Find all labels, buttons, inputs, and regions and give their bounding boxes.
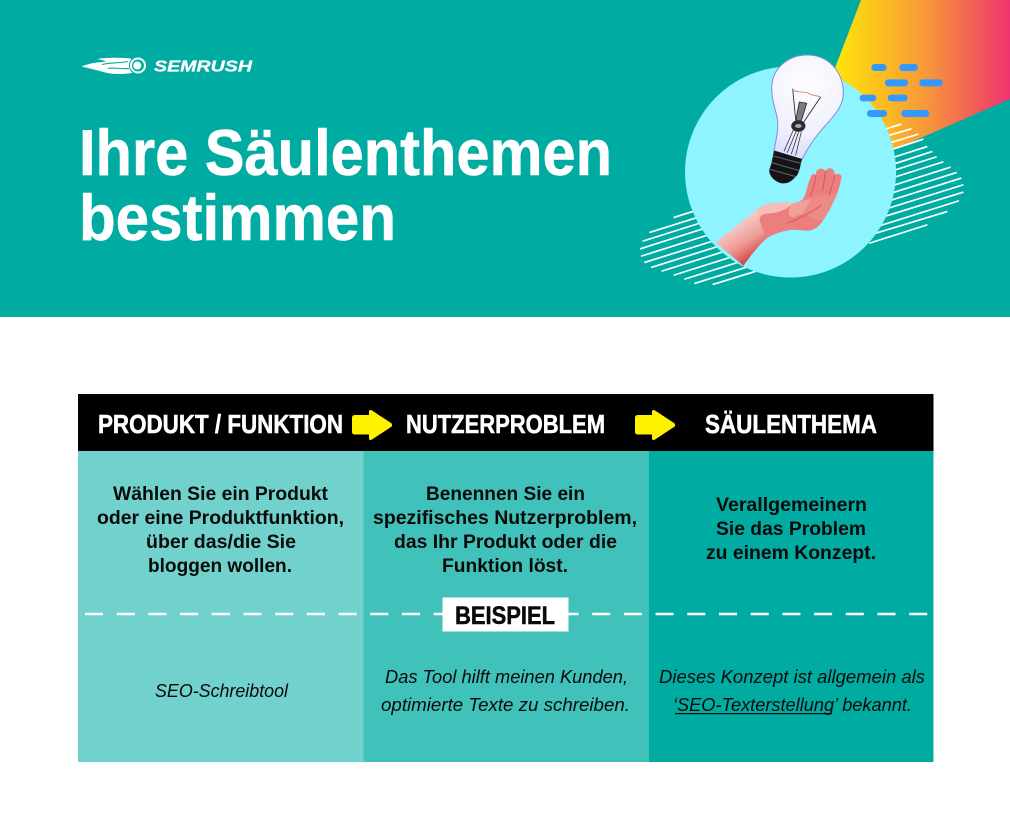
text block: Nutzerproblem description [373, 484, 637, 577]
text block: Säulenthema description: Sie das Problem [716, 519, 866, 540]
example: Säulenthema: ‘SEO-Texterstellung’ bekannt. [673, 695, 912, 715]
text block: Säulenthema description: zu einem Konzept. [706, 543, 876, 564]
header bar [78, 394, 934, 451]
label: Beispiel: BEISPIEL [455, 602, 555, 630]
panel: Produkt / Funktion [78, 451, 364, 762]
text block: Produkt description: Wählen Sie ein Produkt [113, 484, 329, 505]
title: bestimmen [79, 181, 396, 254]
text block: Produkt description: oder eine Produktfunktion, [97, 508, 344, 529]
white diagonal stripes [641, 124, 963, 284]
heading: Säulenthema: SÄULENTHEMA [705, 409, 877, 439]
gradient ray [835, 0, 1010, 150]
text block: Nutzerproblem description: Benennen Sie ein [426, 484, 585, 505]
text block: Säulenthema description [706, 495, 876, 564]
icon: comet [82, 56, 147, 74]
illustration: light bulb and hand [641, 0, 1010, 284]
example: Nutzerproblem: Das Tool hilft meinen Kunden, [385, 667, 628, 687]
logo: Semrush [82, 56, 253, 76]
arrow 2 [635, 410, 675, 440]
hand [716, 168, 842, 266]
heading: Nutzerproblem: NUTZERPROBLEM [406, 409, 605, 439]
text block: Produkt description: über das/die Sie [146, 532, 296, 553]
example: Nutzerproblem: optimierte Texte zu schreiben. [381, 695, 630, 715]
light blue circle [685, 66, 896, 278]
example: Nutzerproblem [381, 667, 630, 715]
screw base [769, 151, 802, 183]
text block: Säulenthema description: Verallgemeinern [716, 495, 867, 516]
example: Säulenthema [659, 667, 925, 715]
panel: Säulenthema [649, 451, 934, 762]
blue dashes [860, 64, 943, 117]
example: Produkt: SEO-Schreibtool [155, 681, 289, 701]
example: Säulenthema: Dieses Konzept ist allgemein als [659, 667, 925, 687]
header banner [0, 0, 1010, 317]
table [78, 394, 934, 762]
light bulb [769, 55, 843, 183]
title: Ihre Säulenthemen [79, 116, 612, 189]
arrow 1 [352, 410, 392, 440]
bulb glass [772, 55, 843, 159]
logo wordmark: SEMRUSH [154, 58, 253, 76]
filament [784, 89, 821, 155]
text block: Nutzerproblem description: Funktion löst. [442, 556, 568, 577]
text block: Nutzerproblem description: das Ihr Produkt oder die [394, 532, 617, 553]
text block: Produkt description: bloggen wollen. [148, 556, 292, 577]
panel: Nutzerproblem [364, 451, 649, 762]
title [79, 116, 612, 254]
text block: Produkt description [97, 484, 344, 577]
heading: Produkt / Funktion: PRODUKT / FUNKTION [98, 409, 343, 439]
text block: Nutzerproblem description: spezifisches Nutzerproblem, [373, 508, 637, 529]
